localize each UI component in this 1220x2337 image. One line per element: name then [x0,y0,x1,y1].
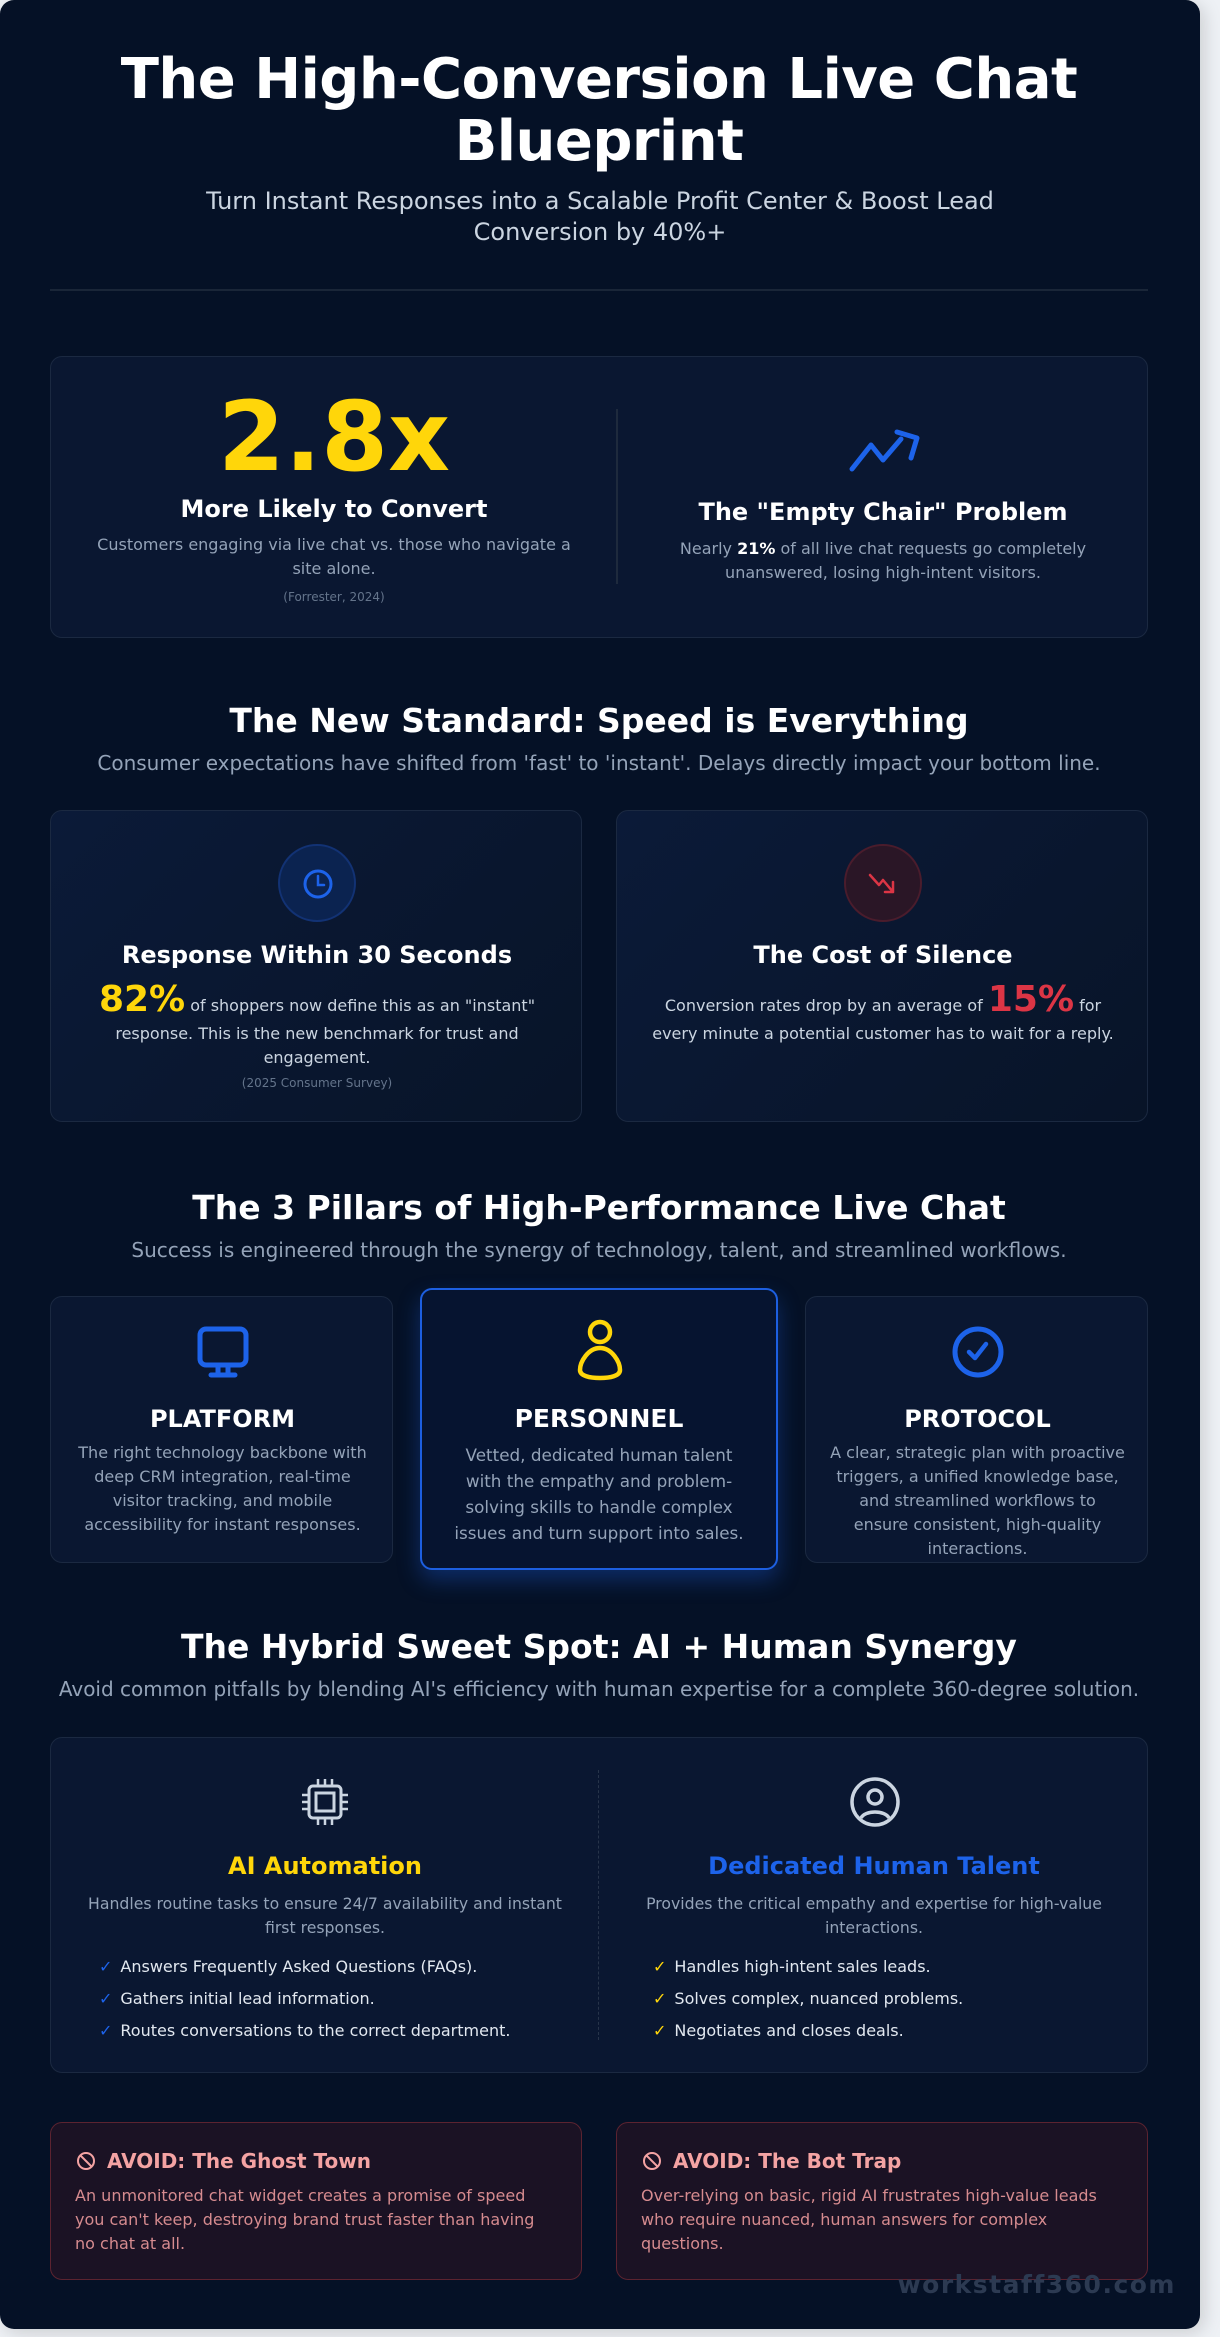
pillar description: deep CRM integration, real-time [94,1467,351,1486]
checklist: ✓ Gathers initial lead information. [99,1989,375,2008]
checklist: ✓ Handles high-intent sales leads. [653,1957,931,1976]
stat label: More Likely to Convert [181,495,487,523]
title: The High-Conversion Live Chat Blueprint [121,47,1077,174]
pillar description: triggers, a unified knowledge base, [836,1467,1119,1486]
pillar description [830,1443,1125,1558]
column title: Dedicated Human Talent [708,1852,1040,1880]
checklist [99,1957,510,2040]
column title: AI Automation [228,1852,422,1880]
pillar description: interactions. [928,1539,1027,1558]
stat text 82%: 82% of shoppers now define this as an "instant" [99,979,535,1020]
icon: prohibited [77,2152,95,2170]
card heading: The Cost of Silence [753,941,1013,969]
pillar description: A clear, strategic plan with proactive [830,1443,1125,1462]
watermark: workstaff360.com [898,2270,1176,2299]
checklist: ✓ Routes conversations to the correct department. [99,2021,510,2040]
source: (2025 Consumer Survey) [242,1076,392,1090]
stat text 82%: engagement. [264,1048,370,1067]
pillar title: PLATFORM [150,1405,295,1433]
pillar title: PROTOCOL [904,1405,1051,1433]
pillar description: issues and turn support into sales. [454,1523,744,1543]
callout: ghost town [50,2122,582,2280]
panel: key stats [50,356,1148,638]
icon: trend down [844,844,922,922]
stat text 15%: every minute a potential customer has to wait for a reply. [652,1024,1114,1043]
pillar description: and streamlined workflows to [859,1491,1096,1510]
pillar title: PERSONNEL [515,1404,683,1433]
column description: Provides the critical empathy and expertise for high-value interactions. [646,1894,1102,1937]
column: human talent [646,1777,1102,2040]
empty chair description: Nearly 21% of all live chat requests go completely unanswered, losing high-intent visitors. [680,539,1086,582]
stat text 82% [99,979,535,1067]
pillar description [78,1443,367,1534]
callout text: An unmonitored chat widget creates a promise of speed you can't keep, destroying brand trust faster than having no chat at all. [75,2186,534,2253]
stat text 82%: response. This is the new benchmark for trust and [115,1024,519,1043]
panel: cost of silence [616,810,1148,1122]
icon: monitor [198,1326,248,1378]
panel: protocol [805,1296,1148,1563]
panel: response within 30 seconds [50,810,582,1122]
section subtitle: pillars: Success is engineered through the synergy of technology, talent, and streamlined workflows. [131,1238,1067,1262]
pillar description: ensure consistent, high-quality [854,1515,1101,1534]
checklist: ✓ Negotiates and closes deals. [653,2021,904,2040]
callout: bot trap [616,2122,1148,2280]
panel: hybrid comparison [50,1737,1148,2073]
panel: personnel (highlighted) [420,1288,778,1570]
pillar description: The right technology backbone with [78,1443,367,1462]
section heading: speed: The New Standard: Speed is Everything [229,701,969,740]
callout title: AVOID: The Bot Trap [673,2149,901,2173]
pillar description: solving skills to handle complex [465,1497,733,1517]
callout text: Over-relying on basic, rigid AI frustrates high-value leads who require nuanced, human answers for complex questions. [641,2186,1097,2253]
icon: check circle [952,1326,1004,1378]
panel: platform [50,1296,393,1563]
pillar description: with the empathy and problem- [466,1471,732,1491]
stat description: Customers engaging via live chat vs. those who navigate a site alone. [97,535,571,578]
column description: Handles routine tasks to ensure 24/7 availability and instant first responses. [88,1894,562,1937]
icon: person [578,1320,622,1380]
subtitle: Turn Instant Responses into a Scalable Profit Center & Boost Lead Conversion by 40%+ [206,187,994,246]
icon: trend arrow [850,430,920,472]
source: (Forrester, 2024) [283,590,385,604]
checklist: ✓ Answers Frequently Asked Questions (FAQs). [99,1957,477,1976]
callout title: AVOID: The Ghost Town [107,2149,371,2173]
icon: user circle [850,1777,900,1827]
column: AI automation [88,1779,562,2040]
pillar description [454,1445,744,1543]
icon: prohibited [643,2152,661,2170]
stat: 2.8x: 2.8x [218,381,450,493]
pillar description: Vetted, dedicated human talent [466,1445,732,1465]
icon: chip [302,1779,348,1825]
card heading: Response Within 30 Seconds [122,941,512,969]
section subtitle: speed: Consumer expectations have shifted from 'fast' to 'instant'. Delays directly impact your bottom line. [97,751,1101,775]
checklist [653,1957,963,2040]
empty chair heading: The "Empty Chair" Problem [698,498,1068,526]
stat text 15%: Conversion rates drop by an average of 15% for [665,979,1101,1020]
pillar description: visitor tracking, and mobile [113,1491,332,1510]
stat text 15% [652,979,1114,1043]
checklist: ✓ Solves complex, nuanced problems. [653,1989,963,2008]
pillar description: accessibility for instant responses. [84,1515,361,1534]
icon: clock [278,844,356,922]
section heading: hybrid: The Hybrid Sweet Spot: AI + Human Synergy [181,1627,1017,1666]
section subtitle: hybrid: Avoid common pitfalls by blending AI's efficiency with human expertise for a complete 360-degree solution. [59,1677,1139,1701]
section heading: pillars: The 3 Pillars of High-Performance Live Chat [192,1188,1006,1227]
